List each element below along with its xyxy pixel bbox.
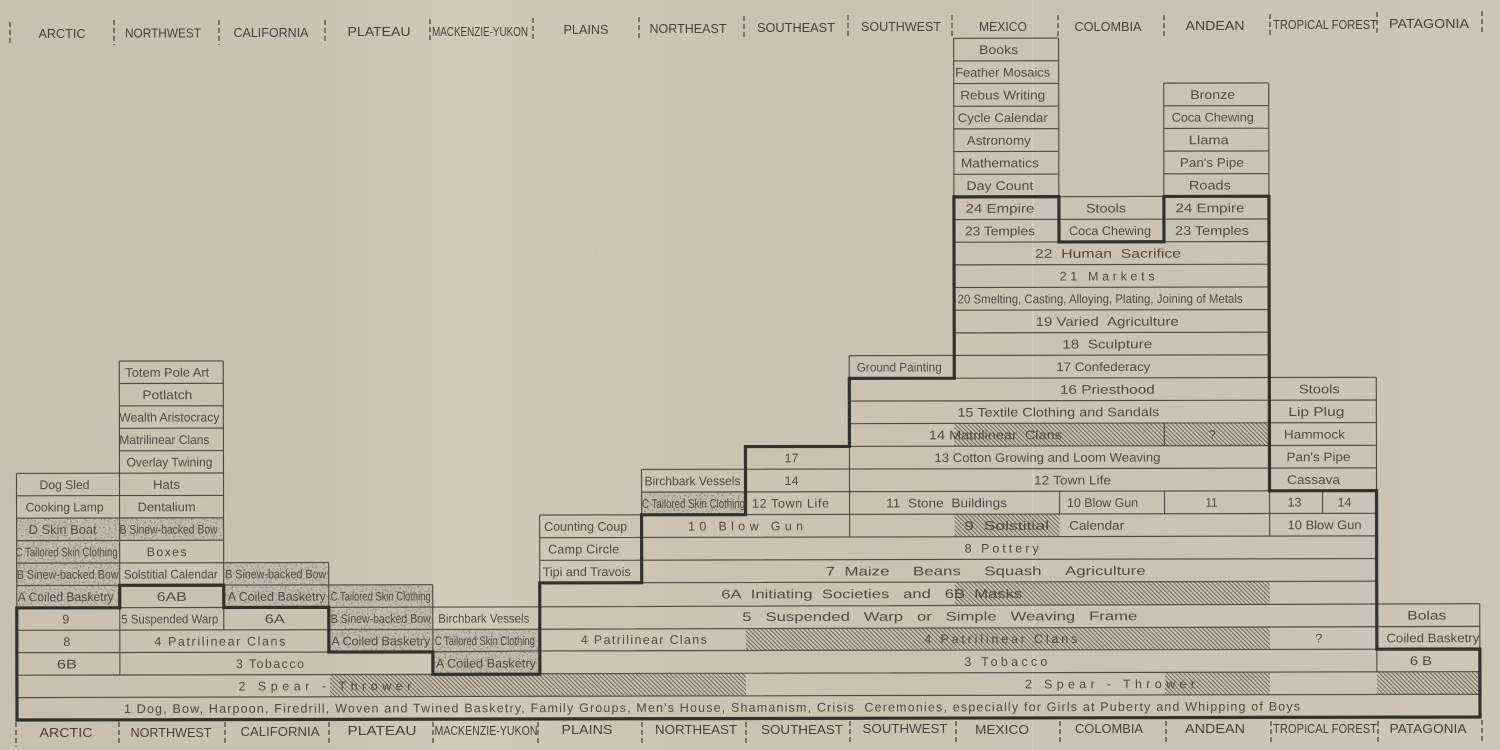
southwest and nuclear America bands: ? bbox=[1209, 428, 1216, 442]
southwest and nuclear America bands: 15 Textile Clothing and Sandals bbox=[957, 405, 1159, 420]
column: Arctic traits: B Sinew-backed Bow bbox=[17, 568, 120, 582]
long horizontal bands across the continent: 2 Spear - Thrower bbox=[238, 679, 411, 693]
long horizontal bands across the continent: 4 Patrilinear Clans bbox=[924, 632, 1077, 646]
column: Patagonia traits: Coiled Basketry bbox=[1386, 631, 1480, 645]
column: Northwest traits: Hats bbox=[153, 478, 180, 492]
column: Southeast traits: 17 bbox=[784, 451, 799, 465]
bottom row of culture area labels: CALIFORNIA bbox=[240, 724, 320, 739]
column: Arctic traits: D Skin Boat bbox=[29, 523, 97, 537]
long horizontal bands across the continent: ? bbox=[1315, 632, 1322, 646]
column: Southeast traits bbox=[752, 451, 829, 511]
top row of culture area labels: ARCTIC bbox=[38, 26, 86, 41]
column: Tropical Forest traits: Hammock bbox=[1284, 428, 1346, 442]
column: Andean upper traits: 24 Empire bbox=[1175, 201, 1244, 215]
column: Mackenzie-Yukon traits: A Coiled Basketry bbox=[436, 656, 537, 671]
column: Northwest traits: Solstitial Calendar bbox=[124, 567, 218, 582]
southwest and nuclear America bands: 16 Priesthood bbox=[1060, 383, 1155, 397]
bottom row of culture area labels: ARCTIC bbox=[40, 725, 92, 740]
southwest and nuclear America bands bbox=[688, 246, 1243, 534]
column: Arctic traits: 9 bbox=[62, 613, 69, 627]
column: Plains traits: Camp Circle bbox=[548, 542, 619, 557]
column: Northwest traits: Potlatch bbox=[142, 388, 192, 402]
long horizontal bands across the continent: 3 Tobacco bbox=[236, 657, 304, 671]
column: Mackenzie-Yukon traits bbox=[435, 612, 537, 671]
column: Arctic traits: 6B bbox=[57, 657, 77, 671]
long horizontal bands across the continent: 7 Maize Beans Squash Agriculture bbox=[826, 564, 1146, 579]
top row of culture area labels: SOUTHEAST bbox=[757, 20, 835, 35]
top row of culture area labels bbox=[10, 11, 1482, 46]
column: Patagonia traits: Bolas bbox=[1407, 609, 1446, 623]
column: Southeast traits: 14 bbox=[784, 474, 799, 488]
column: Arctic traits: A Coiled Basketry bbox=[18, 590, 114, 604]
column: Patagonia traits: 6 B bbox=[1410, 654, 1432, 668]
southwest and nuclear America bands: 21 Markets bbox=[1060, 269, 1155, 284]
column: Patagonia traits bbox=[1386, 608, 1480, 668]
column: Northwest traits: Boxes bbox=[147, 545, 187, 559]
column: Arctic traits: 8 bbox=[63, 635, 70, 649]
column: Andean upper traits: Roads bbox=[1189, 178, 1231, 193]
long horizontal bands across the continent: 3 Tobacco bbox=[964, 655, 1047, 669]
column: Plateau traits: C Tailored Skin Clothing bbox=[331, 589, 431, 604]
long horizontal bands across the continent: 1 Dog, Bow, Harpoon, Firedrill, Woven and Twined Basketry, Family Groups, Men's House, Shamanism, Crisis Ceremonies, especially for Girls at Puberty and Whipping of Boys bbox=[124, 700, 1300, 716]
bottom row of culture area labels: TROPICAL FOREST bbox=[1273, 721, 1377, 736]
column: Tropical Forest traits bbox=[1284, 382, 1362, 532]
column: Northwest traits: Overlay Twining bbox=[126, 455, 213, 470]
bottom row of culture area labels: SOUTHWEST bbox=[862, 721, 948, 736]
long horizontal bands across the continent: 8 Pottery bbox=[965, 541, 1039, 556]
bottom row of culture area labels: PATAGONIA bbox=[1390, 721, 1467, 736]
top row of culture area labels: NORTHWEST bbox=[125, 26, 201, 40]
column: Mackenzie-Yukon traits: Birchbark Vessels bbox=[438, 612, 529, 626]
column: Northwest traits: Dentalium bbox=[138, 500, 196, 514]
column: Mexico upper traits: Mathematics bbox=[961, 156, 1039, 170]
column: California traits bbox=[225, 567, 327, 626]
column: Plateau traits: B Sinew-backed Bow bbox=[331, 612, 432, 626]
column: Andean upper traits: Coca Chewing bbox=[1172, 110, 1254, 125]
top row of culture area labels: TROPICAL FOREST bbox=[1273, 17, 1377, 32]
southwest and nuclear America bands: 14 Matrilinear Clans bbox=[929, 428, 1062, 442]
column: Mexico upper traits: 23 Temples bbox=[965, 224, 1035, 238]
top row of culture area labels: CALIFORNIA bbox=[234, 25, 309, 40]
long horizontal bands across the continent bbox=[124, 541, 1323, 716]
bottom row of culture area labels bbox=[16, 720, 1482, 747]
top row of culture area labels: PLATEAU bbox=[348, 24, 410, 39]
southwest and nuclear America bands: 17 Confederacy bbox=[1056, 360, 1151, 374]
column: California traits: 6A bbox=[265, 612, 286, 626]
column: Mackenzie-Yukon traits: C Tailored Skin Clothing bbox=[435, 634, 535, 648]
long horizontal bands across the continent: 4 Patrilinear Clans bbox=[581, 633, 707, 647]
column: Mexico upper traits: Day Count bbox=[966, 179, 1034, 193]
top row of culture area labels: PLAINS bbox=[564, 22, 609, 37]
column: Northwest traits: Wealth Aristocracy bbox=[119, 410, 220, 425]
column: Northeast traits bbox=[642, 474, 745, 511]
bottom row of culture area labels: MACKENZIE-YUKON bbox=[434, 723, 538, 738]
column: Arctic traits: C Tailored Skin Clothing bbox=[16, 545, 118, 559]
southwest and nuclear America bands: Calendar bbox=[1069, 519, 1124, 533]
bottom row of culture area labels: PLAINS bbox=[562, 722, 613, 737]
column: Mexico upper traits bbox=[955, 43, 1050, 238]
column: Tropical Forest traits: 10 Blow Gun bbox=[1288, 518, 1362, 532]
column: Tropical Forest traits: 14 bbox=[1338, 495, 1352, 509]
column: Plateau traits: A Coiled Basketry bbox=[331, 634, 431, 648]
top row of culture area labels: NORTHEAST bbox=[650, 21, 727, 36]
southwest and nuclear America bands: Ground Painting bbox=[857, 360, 942, 375]
top row of culture area labels: COLOMBIA bbox=[1074, 19, 1142, 34]
column: Mexico upper traits: Rebus Writing bbox=[960, 88, 1045, 102]
column: Mexico upper traits: Astronomy bbox=[967, 134, 1032, 148]
southwest and nuclear America bands: 11 bbox=[1206, 496, 1218, 510]
column: Plains traits: Counting Coup bbox=[544, 520, 627, 534]
column: Colombia upper traits bbox=[1069, 201, 1151, 238]
column: Mexico upper traits: 24 Empire bbox=[965, 202, 1034, 216]
long horizontal bands across the continent: 4 Patrilinear Clans bbox=[154, 634, 285, 649]
top row of culture area labels: SOUTHWEST bbox=[861, 19, 941, 34]
column: Mexico upper traits: Cycle Calendar bbox=[958, 111, 1048, 125]
column: Tropical Forest traits: Cassava bbox=[1287, 473, 1340, 487]
bottom row of culture area labels: MEXICO bbox=[975, 722, 1029, 737]
column: Tropical Forest traits: Pan's Pipe bbox=[1286, 450, 1351, 464]
column: Northeast traits: C Tailored Skin Clothing bbox=[642, 497, 745, 511]
column: Northwest traits: 6AB bbox=[157, 590, 187, 604]
stippled cell base bbox=[17, 492, 746, 675]
column: Arctic traits: Cooking Lamp bbox=[26, 500, 104, 515]
top row of culture area labels: PATAGONIA bbox=[1389, 16, 1469, 31]
southwest and nuclear America bands: 18 Sculpture bbox=[1062, 337, 1152, 351]
long horizontal bands across the continent: 6A Initiating Societies and 6B Masks bbox=[721, 587, 1022, 601]
column: Colombia upper traits: Stools bbox=[1086, 201, 1126, 215]
column: Colombia upper traits: Coca Chewing bbox=[1069, 224, 1151, 238]
bottom row of culture area labels: ANDEAN bbox=[1185, 721, 1245, 736]
column: Northeast traits: Birchbark Vessels bbox=[644, 474, 741, 488]
column: Andean upper traits bbox=[1172, 88, 1254, 238]
hatched cells: doubtful traits bbox=[329, 422, 1480, 697]
column: California traits: A Coiled Basketry bbox=[228, 590, 326, 604]
column: Northwest traits: 5 Suspended Warp bbox=[121, 612, 218, 626]
column: Tropical Forest traits: 13 bbox=[1288, 496, 1302, 510]
column: Mexico upper traits: Feather Mosaics bbox=[955, 66, 1050, 80]
column: Mexico upper traits: Books bbox=[979, 43, 1018, 57]
column: Andean upper traits: Bronze bbox=[1190, 88, 1235, 102]
column: Andean upper traits: Pan's Pipe bbox=[1180, 156, 1244, 170]
column: Plateau traits bbox=[331, 589, 432, 648]
southwest and nuclear America bands: 12 Town Life bbox=[1034, 473, 1111, 488]
top row of culture area labels: MEXICO bbox=[979, 19, 1027, 34]
southwest and nuclear America bands: 10 Blow Gun bbox=[688, 519, 803, 534]
column: Tropical Forest traits: Stools bbox=[1299, 382, 1340, 396]
southwest and nuclear America bands: 10 Blow Gun bbox=[1067, 496, 1138, 510]
column: Northwest traits: Totem Pole Art bbox=[125, 366, 210, 380]
column: Arctic traits bbox=[15, 478, 120, 672]
long horizontal bands across the continent: 2 Spear - Thrower bbox=[1025, 677, 1195, 691]
heavy outline of the diffusion boundary bbox=[16, 196, 1480, 720]
column: Southeast traits: 12 Town Life bbox=[752, 497, 829, 511]
bottom row of culture area labels: SOUTHEAST bbox=[761, 722, 843, 737]
southwest and nuclear America bands: 19 Varied Agriculture bbox=[1036, 315, 1179, 329]
southwest and nuclear America bands: 13 Cotton Growing and Loom Weaving bbox=[934, 451, 1161, 465]
bottom row of culture area labels: NORTHWEST bbox=[130, 725, 212, 740]
southwest and nuclear America bands: 20 Smelting, Casting, Alloying, Plating, Joining of Metals bbox=[958, 292, 1243, 306]
column: Arctic traits: Dog Sled bbox=[39, 478, 90, 492]
top row of culture area labels: MACKENZIE-YUKON bbox=[432, 24, 528, 39]
column: Plains traits bbox=[543, 520, 631, 579]
column: Plains traits: Tipi and Travois bbox=[543, 565, 631, 579]
column: Northwest traits bbox=[119, 366, 221, 626]
stippled cell dots: diffused traits bbox=[17, 492, 746, 675]
column: California traits: B Sinew-backed Bow bbox=[225, 567, 327, 581]
bottom row of culture area labels: COLOMBIA bbox=[1075, 721, 1143, 736]
bottom row of culture area labels: NORTHEAST bbox=[655, 722, 737, 737]
column: Tropical Forest traits: Lip Plug bbox=[1288, 405, 1344, 419]
column: Andean upper traits: 23 Temples bbox=[1175, 224, 1249, 238]
column: Andean upper traits: Llama bbox=[1189, 133, 1229, 147]
column: Northwest traits: Matrilinear Clans bbox=[119, 433, 209, 447]
bottom row of culture area labels: PLATEAU bbox=[348, 723, 416, 738]
southwest and nuclear America bands: 22 Human Sacrifice bbox=[1035, 247, 1181, 261]
southwest and nuclear America bands: 11 Stone Buildings bbox=[886, 496, 1007, 510]
southwest and nuclear America bands: 9 Solstitial bbox=[964, 519, 1049, 533]
column: Northwest traits: B Sinew-backed Bow bbox=[120, 523, 218, 537]
long horizontal bands across the continent: 5 Suspended Warp or Simple Weaving Frame bbox=[742, 609, 1137, 624]
top row of culture area labels: ANDEAN bbox=[1186, 18, 1244, 33]
